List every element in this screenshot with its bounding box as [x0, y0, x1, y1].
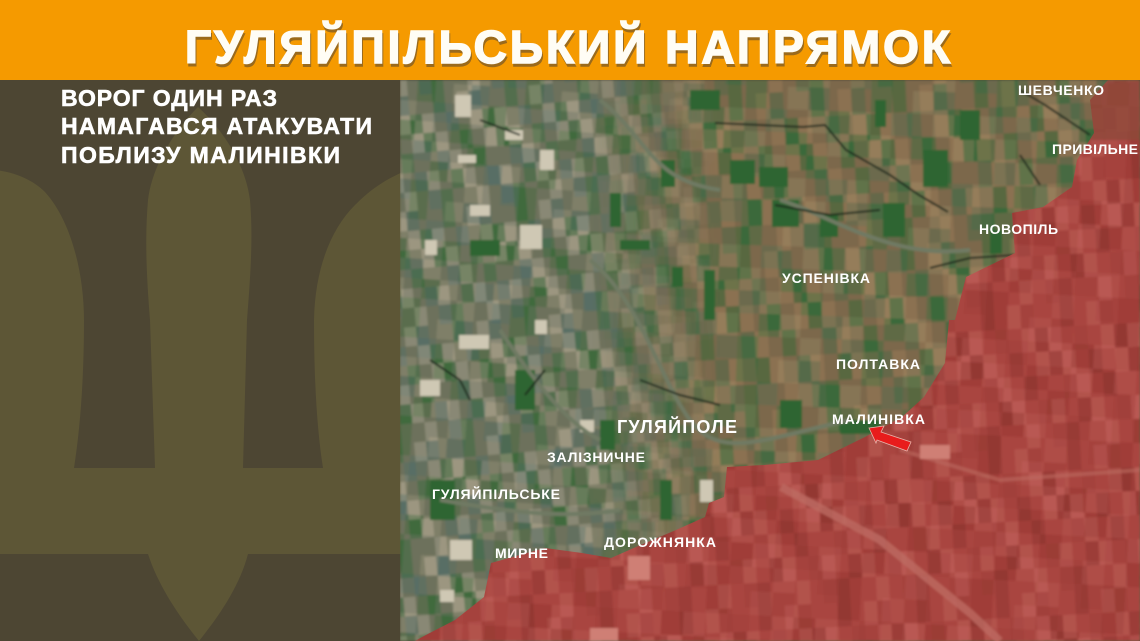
river gullies [440, 100, 970, 514]
label: Шевченко: ШЕВЧЕНКО [1018, 82, 1104, 98]
arrow: attack direction near Malynivka [869, 426, 911, 451]
label: Залізничне: ЗАЛІЗНИЧНЕ [547, 449, 645, 465]
text block: enemy attack summary [61, 85, 372, 168]
text block: enemy attack summary: ПОБЛИЗУ МАЛИНІВКИ [61, 142, 340, 168]
label: Дорожнянка: ДОРОЖНЯНКА [604, 534, 716, 550]
label: Привільне: ПРИВІЛЬНЕ [1052, 141, 1138, 157]
map fields [400, 80, 1140, 641]
label: Полтавка: ПОЛТАВКА [836, 356, 920, 372]
label: Гуляйпільське: ГУЛЯЙПІЛЬСЬКЕ [432, 485, 560, 502]
occupied territory [400, 80, 1140, 641]
icon: trident emblem [0, 107, 420, 641]
map labels [432, 82, 1138, 561]
text block: enemy attack summary: НАМАГАВСЯ АТАКУВАТИ [61, 113, 372, 139]
label: Новопіль: НОВОПІЛЬ [979, 221, 1058, 237]
label: Мирне: МИРНЕ [495, 545, 548, 561]
text block: enemy attack summary: ВОРОГ ОДИН РАЗ [61, 85, 277, 111]
title: ГУЛЯЙПІЛЬСЬКИЙ НАПРЯМОК [186, 24, 952, 76]
label: Гуляйполе: ГУЛЯЙПОЛЕ [617, 416, 737, 437]
header banner [0, 0, 1140, 80]
title: ГУЛЯЙПІЛЬСЬКИЙ НАПРЯМОК [185, 21, 951, 73]
label: Малинівка: МАЛИНІВКА [832, 411, 925, 427]
label: Успенівка: УСПЕНІВКА [782, 270, 870, 286]
panel: satellite map [400, 80, 1140, 641]
